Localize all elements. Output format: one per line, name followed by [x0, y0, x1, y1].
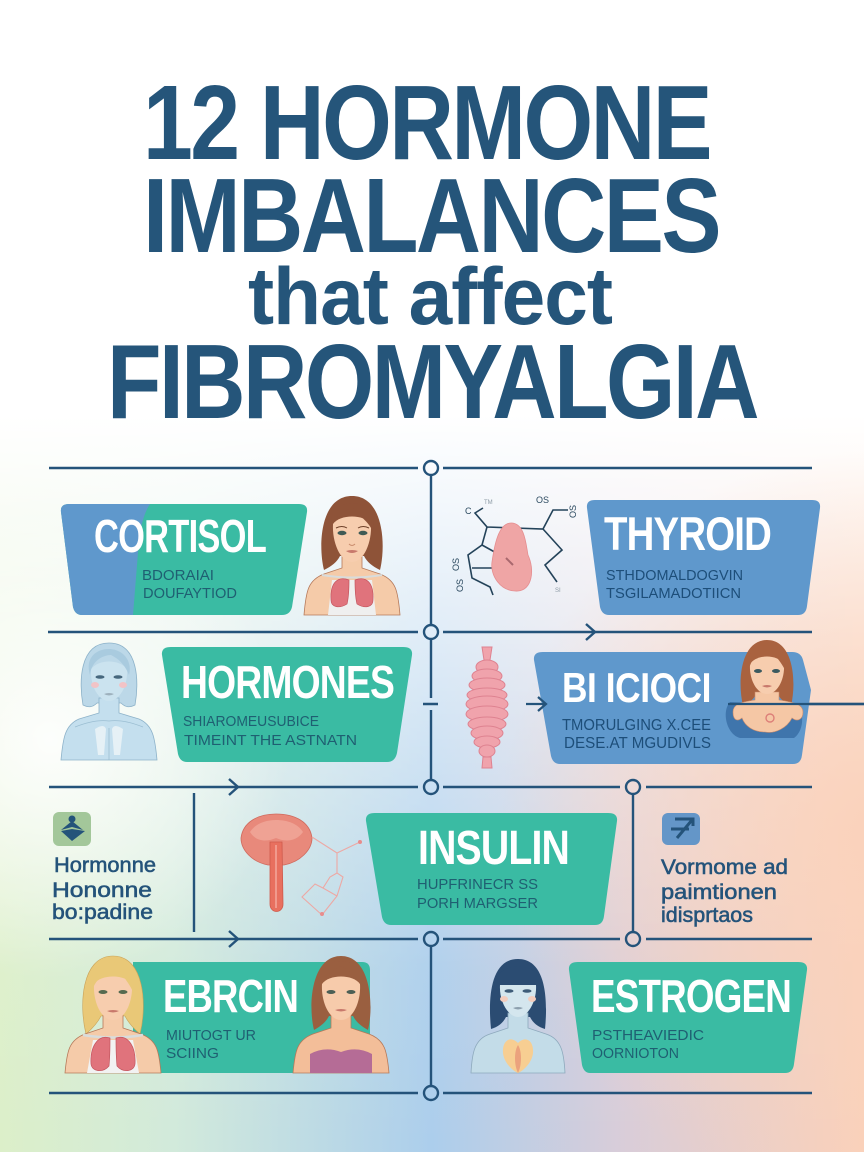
connector over woman [728, 703, 864, 705]
panel: bicioci: DESE.AT MGUDIVLS [564, 735, 711, 752]
text: right note: Vormome ad [661, 856, 788, 879]
icon: thyroid molecule: OS [536, 495, 549, 505]
panel: thyroid: STHDOMALDOGVIN [606, 568, 743, 584]
connector grid lines [48, 461, 864, 1100]
panel: insulin: PORH MARGSER [417, 896, 538, 912]
panel: thyroid: THYROID [604, 507, 771, 560]
panel: cortisol: DOUFAYTIOD [143, 586, 237, 602]
panel: ebrcin: MIUTOGT UR [166, 1028, 256, 1044]
panel: hormones [162, 647, 412, 762]
icon: thyroid molecule: TM [484, 500, 493, 506]
arrow: row 2 [586, 624, 595, 640]
text: left note: bo:padine [52, 901, 153, 924]
icon: thyroid molecule: OS [568, 505, 578, 518]
title [107, 64, 757, 441]
icon: pink gland [241, 814, 362, 916]
panel: cortisol: CORTISOL [94, 510, 266, 562]
panel: thyroid: TSGILAMADOTIICN [606, 586, 741, 602]
panel: estrogen [569, 962, 807, 1073]
person: dark haired blue figure [471, 959, 565, 1073]
text: left note: Hormonne [54, 854, 156, 877]
panel: hormones: TIMEINT THE ASTNATN [184, 733, 357, 749]
person: pale blue figure [61, 643, 157, 760]
panel: bicioci [534, 652, 811, 764]
text: right note: paimtionen [661, 881, 777, 904]
text: right note: idisprtaos [661, 904, 753, 927]
icon: thyroid molecule: OS [455, 579, 465, 592]
person: brunette woman in purple top [293, 956, 389, 1073]
panel: estrogen: PSTHEAVIEDIC [592, 1028, 704, 1044]
arrow: row 3 [229, 779, 238, 795]
person: blonde woman with lungs [65, 956, 161, 1073]
panel: insulin [366, 813, 617, 925]
icon: green hormone badge [53, 812, 91, 846]
icon: thyroid molecule [451, 495, 578, 595]
arrow: into blue panel [526, 697, 546, 711]
icon: blue arrow badge [662, 813, 700, 845]
title: FIBROMYALGIA [107, 323, 757, 441]
panel: insulin: INSULIN [418, 822, 569, 875]
panel: ebrcin: SCIING [166, 1046, 219, 1062]
panel: bicioci: TMORULGING X.CEE [562, 717, 711, 734]
text: left note [52, 854, 156, 924]
panel: cortisol: BDORAIAI [142, 568, 214, 584]
icon: thyroid molecule: OS [451, 558, 461, 571]
title: that affect [248, 252, 612, 342]
person: woman over blue panel [726, 640, 803, 738]
arrow: row 4 [229, 931, 238, 947]
panel: ebrcin: EBRCIN [163, 970, 298, 1022]
icon: thyroid molecule: C [465, 506, 472, 516]
title: IMBALANCES [143, 157, 719, 275]
panel: insulin: HUPFRINECR SS [417, 877, 538, 893]
panel: hormones: HORMONES [181, 656, 394, 708]
icon: pink segmented organ [466, 647, 508, 768]
panel: estrogen: ESTROGEN [591, 970, 791, 1022]
panel: hormones: SHIAROMEUSUBICE [183, 714, 319, 730]
text: right note [661, 856, 788, 927]
panel: estrogen: OORNIOTON [592, 1046, 679, 1062]
panel: bicioci: BI ICIOCI [562, 664, 711, 711]
person: brown haired woman with lungs [304, 496, 400, 615]
panel: ebrcin [133, 962, 370, 1073]
panel: cortisol [61, 504, 307, 615]
text: left note: Hononne [52, 879, 152, 902]
panel: thyroid [587, 500, 820, 615]
icon: thyroid molecule: SI [555, 588, 561, 594]
title: 12 HORMONE [143, 64, 710, 182]
